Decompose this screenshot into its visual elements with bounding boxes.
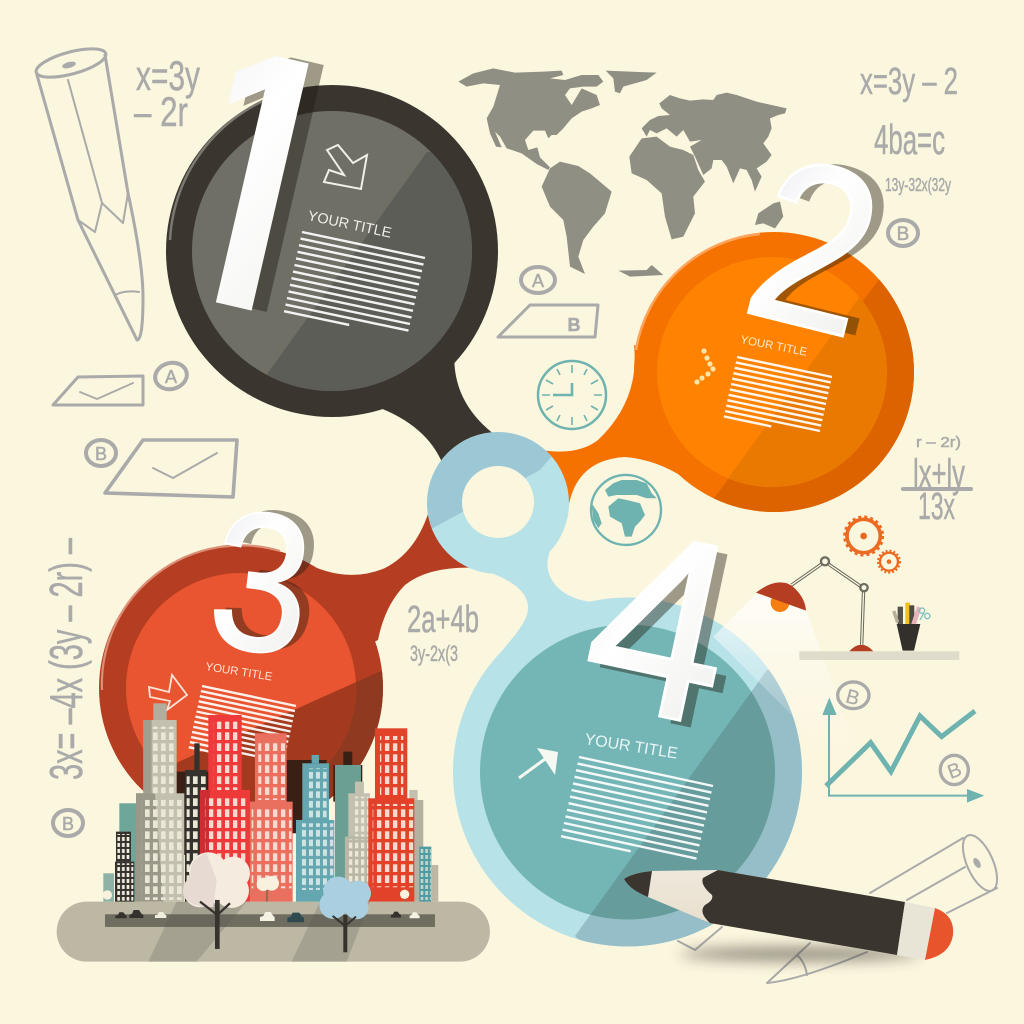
- left sketched pencil: [33, 43, 143, 340]
- circled B lower: [940, 755, 968, 785]
- street ground: [57, 902, 490, 962]
- sketched pencil behind: [678, 830, 1004, 983]
- red right tower: [368, 728, 414, 902]
- text lines 3: [189, 686, 296, 767]
- connector: red: [300, 500, 480, 680]
- math note: 2a+4b: [407, 599, 479, 666]
- math note: fraction: r – 2r): [916, 434, 961, 451]
- connector: orange: [530, 345, 780, 510]
- salmon tower: [250, 733, 293, 902]
- box with B centre: B: [568, 315, 580, 335]
- circled B top right: [888, 220, 918, 246]
- city illustration: [57, 703, 490, 962]
- grey tower: [136, 703, 184, 902]
- arrow icon 3: [149, 675, 187, 710]
- math note: x=3y - 2r: x=3y: [136, 52, 200, 99]
- pencil shadow: [680, 947, 920, 961]
- dark pencil: [624, 870, 953, 960]
- shelf: [799, 651, 959, 660]
- line chart: [822, 698, 984, 803]
- numeral 3: 3: [199, 466, 323, 698]
- blue tree: [319, 877, 371, 952]
- math notes top right: x=3y – 2: [860, 61, 958, 103]
- box with B centre: [498, 305, 598, 337]
- title 3: YOUR TITLE: [205, 661, 273, 684]
- math notes top right: 13y-32x(32y: [885, 175, 951, 195]
- circled B vertical: B: [62, 814, 74, 834]
- back buildings: [103, 765, 361, 902]
- dotted chevron icon: [694, 348, 716, 385]
- circled A centre: A: [532, 271, 544, 291]
- pink tree: [183, 852, 250, 949]
- text lines 4: [561, 757, 713, 865]
- circled B vertical: [53, 810, 83, 836]
- connector ring: [427, 432, 569, 574]
- math note: fraction: lx+ly: [913, 452, 965, 496]
- circled B lower: B: [945, 759, 965, 784]
- light stripes: [148, 902, 370, 962]
- connector: dark: [372, 345, 505, 470]
- circled B on chart: [838, 682, 869, 710]
- numeral 2: 2: [726, 107, 904, 387]
- dark silhouettes: [177, 752, 362, 855]
- math note: fraction: 13x: [918, 486, 955, 528]
- text lines 2: [724, 357, 832, 436]
- math note: fraction: [901, 434, 973, 528]
- circled B left: [86, 440, 116, 466]
- circled A left: A: [165, 367, 177, 387]
- panel 1: dark circle: [166, 85, 498, 417]
- math notes top right: 4ba=c: [874, 116, 945, 163]
- numeral 1: [216, 56, 324, 312]
- title 4: YOUR TITLE: [583, 731, 679, 763]
- red tower: [200, 715, 250, 902]
- small trees: [103, 876, 409, 902]
- arrow icon 1: [324, 145, 367, 189]
- dark tower: [185, 743, 207, 902]
- connector: blue neck: [473, 520, 650, 680]
- gears: [845, 517, 900, 573]
- circled B on chart: B: [843, 686, 862, 710]
- checkbox A left: [53, 376, 143, 405]
- arrow icon 4: [519, 748, 558, 778]
- light beam: [713, 593, 860, 760]
- checkbox B left: [105, 440, 237, 497]
- world map: [458, 68, 787, 277]
- panel 4: blue circle: [453, 598, 802, 946]
- circled B top right: B: [897, 224, 909, 245]
- math note: 2a+4b: 3y-2x(3: [410, 641, 458, 666]
- numeral 4: 4: [564, 470, 759, 780]
- text lines 1: [284, 232, 425, 337]
- math note: x=3y - 2r: [134, 52, 200, 135]
- numeral 2: 2: [739, 106, 916, 387]
- globe icon: [591, 475, 661, 545]
- cars: [115, 910, 420, 922]
- lamp: [756, 557, 873, 651]
- circled A left: [152, 359, 190, 393]
- road: [105, 914, 435, 927]
- teal tower: [296, 755, 334, 902]
- title 1: YOUR TITLE: [306, 208, 393, 242]
- math note: 2a+4b: 2a+4b: [407, 599, 479, 641]
- clock icon: [538, 361, 606, 429]
- panel 3: red circle: [99, 545, 400, 840]
- small dark tower left: [115, 820, 134, 902]
- title 2: YOUR TITLE: [739, 334, 808, 359]
- math note: vertical equation: 3x= –4x (3y – 2r) –: [40, 538, 92, 780]
- math note: x=3y - 2r: – 2r: [134, 88, 188, 135]
- math notes top right: [860, 61, 958, 195]
- desk lamp scene: [713, 517, 984, 803]
- panel 2: orange circle: [634, 232, 914, 512]
- numeral 4: 4: [574, 478, 770, 788]
- circled A centre: [521, 267, 555, 293]
- right side buildings: [409, 790, 438, 902]
- circled B left: B: [95, 444, 107, 464]
- pencil cup: [892, 603, 930, 651]
- numeral 3: 3: [209, 464, 334, 695]
- beige tower: [345, 782, 370, 902]
